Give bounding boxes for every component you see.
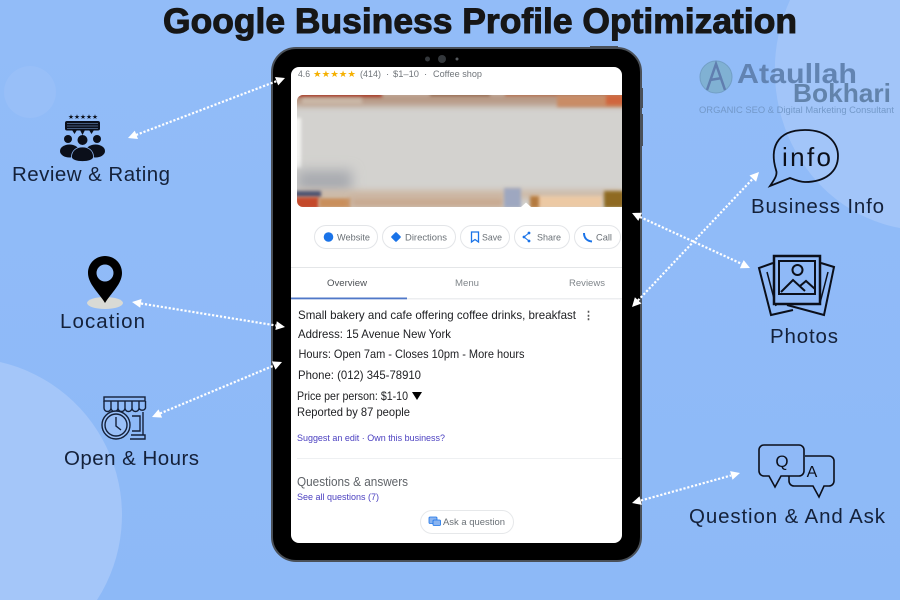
icon: map pin xyxy=(87,256,123,309)
rating row: ★★★★★ xyxy=(313,70,356,80)
arrow: photos xyxy=(632,213,750,268)
ask a question button: Ask a question xyxy=(443,517,505,528)
camera xyxy=(425,55,458,63)
questions and answers xyxy=(297,475,408,503)
tabs xyxy=(291,267,622,300)
tabs: Menu xyxy=(455,278,479,289)
blurred business photo xyxy=(290,92,630,209)
business info item xyxy=(751,130,884,218)
business details: Hours: Open 7am - Closes 10pm - More hours xyxy=(298,347,525,361)
rating row xyxy=(298,70,482,79)
arrow: review and rating xyxy=(128,77,285,139)
website button: Website xyxy=(337,232,370,244)
icon: storefront with clock xyxy=(102,397,146,439)
save button xyxy=(460,226,510,248)
save button: Save xyxy=(482,232,502,244)
share button: Share xyxy=(537,232,561,244)
tablet screen xyxy=(290,67,630,543)
label: Question & And Ask xyxy=(689,505,886,528)
open and hours item xyxy=(64,397,199,470)
rating row: Coffee shop xyxy=(433,69,482,80)
icon: reviewers with stars xyxy=(60,113,105,162)
watermark logo: Bokhari xyxy=(793,78,891,108)
rating row: · xyxy=(386,69,389,80)
label: Photos xyxy=(770,325,838,348)
icon: Q and A speech bubbles xyxy=(759,445,834,497)
questions and answers: Questions & answers xyxy=(297,475,408,489)
photos item xyxy=(759,256,838,348)
rating row: $1–10 xyxy=(393,69,419,80)
arrow: location xyxy=(132,299,285,330)
tabs: Overview xyxy=(327,278,367,289)
rating row: (414) xyxy=(360,69,381,80)
tablet frame xyxy=(272,46,643,561)
business details: Reported by 87 people xyxy=(297,405,410,419)
icon: info speech bubble: info xyxy=(782,142,831,172)
arrow: question and ask xyxy=(632,471,740,505)
arrow: business info xyxy=(632,172,759,307)
label: Business Info xyxy=(751,195,884,218)
call button: Call xyxy=(596,232,612,244)
business details: ⋮ xyxy=(583,310,594,322)
business details: Phone: (012) 345-78910 xyxy=(298,368,421,382)
arrow: open and hours xyxy=(152,361,282,418)
watermark logo: Ataullah xyxy=(737,58,857,89)
icon: reviewers with stars: ★★★★★ xyxy=(68,113,98,121)
icon: stack of photos xyxy=(759,256,834,315)
watermark logo xyxy=(699,58,894,116)
location item xyxy=(60,256,145,333)
label: Location xyxy=(60,310,145,333)
edit links: Suggest an edit · Own this business? xyxy=(297,433,445,444)
website button xyxy=(314,226,378,248)
share button xyxy=(514,226,570,248)
directions button xyxy=(382,226,456,248)
rating row: · xyxy=(424,69,427,80)
label: Review & Rating xyxy=(12,163,170,186)
watermark logo: ORGANIC SEO & Digital Marketing Consultant xyxy=(699,105,894,116)
call button xyxy=(574,226,620,248)
business details xyxy=(297,308,594,419)
rating row: 4.6 xyxy=(298,69,310,80)
questions and answers: See all questions (7) xyxy=(297,492,379,503)
title: Google Business Profile Optimization xyxy=(163,2,797,41)
business details: Small bakery and cafe offering coffee drinks, breakfast xyxy=(298,308,577,322)
business details: Address: 15 Avenue New York xyxy=(298,327,451,341)
question and ask item xyxy=(689,445,886,528)
icon: Q and A speech bubbles: Q xyxy=(775,452,789,471)
ask a question button xyxy=(420,510,514,534)
label: Open & Hours xyxy=(64,447,199,470)
action buttons xyxy=(314,226,620,248)
icon: Q and A speech bubbles: A xyxy=(807,464,818,481)
business details: Price per person: $1-10 xyxy=(297,389,408,403)
directions button: Directions xyxy=(405,232,447,244)
review and rating item xyxy=(12,113,170,186)
tabs: Reviews xyxy=(569,278,605,289)
